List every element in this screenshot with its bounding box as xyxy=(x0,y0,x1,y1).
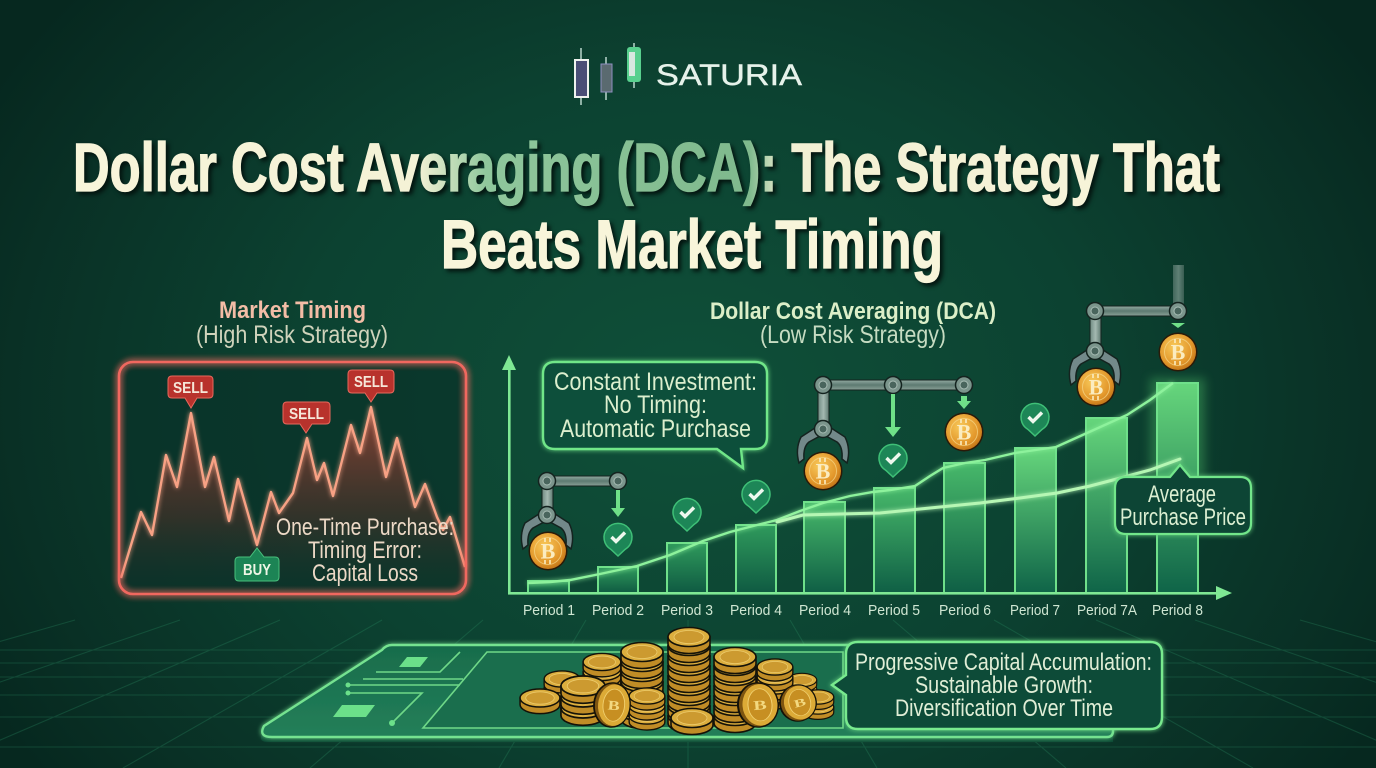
robot arm 3 with coins xyxy=(1069,265,1198,406)
text: one-time purchase note: Capital Loss xyxy=(312,560,418,587)
robot arm 1 with coin xyxy=(521,472,626,570)
tag: sell 2: SELL xyxy=(289,406,324,423)
chart: DCA bars xyxy=(502,355,1232,619)
period labels: Period 4 xyxy=(730,602,782,619)
text: one-time purchase note: One-Time Purchase: xyxy=(276,514,454,541)
callout: average purchase price: Purchase Price xyxy=(1120,504,1246,531)
back stacks xyxy=(544,653,817,710)
heading: market timing xyxy=(196,297,388,349)
callout: progressive capital accumulation: Sustainable Growth: xyxy=(915,672,1093,699)
period labels: Period 7A xyxy=(1077,602,1137,619)
price line xyxy=(121,407,465,578)
callout: constant investment xyxy=(543,362,767,468)
period labels: Period 1 xyxy=(523,602,575,619)
central stack xyxy=(668,628,710,732)
price area fill xyxy=(121,407,465,592)
platform xyxy=(261,645,1113,742)
coin pile xyxy=(520,628,834,734)
period labels: Period 2 xyxy=(592,602,644,619)
floor grid xyxy=(0,620,1376,768)
text: one-time purchase note: Timing Error: xyxy=(308,537,422,564)
heading: market timing: (High Risk Strategy) xyxy=(196,321,388,349)
axes xyxy=(502,355,1232,600)
icon: candlestick logo xyxy=(575,43,641,105)
callout: average purchase price xyxy=(1115,465,1251,534)
tag: sell 3: SELL xyxy=(354,374,388,391)
panel border xyxy=(119,362,466,594)
panel: market timing chart xyxy=(119,362,466,594)
period labels: Period 7 xyxy=(1010,602,1060,619)
callout: constant investment: No Timing: xyxy=(604,391,707,419)
average purchase price curve xyxy=(777,459,1180,522)
circuit chips xyxy=(333,657,428,726)
period labels: Period 3 xyxy=(661,602,713,619)
mid stacks xyxy=(621,642,756,732)
logo: Saturia xyxy=(575,43,802,105)
callout: constant investment: Automatic Purchase xyxy=(560,415,751,443)
tag: buy xyxy=(235,548,279,581)
circuit traces xyxy=(348,652,463,723)
heading: market timing: Market Timing xyxy=(219,297,366,324)
period labels: Period 5 xyxy=(868,602,920,619)
text: one-time purchase note xyxy=(276,514,454,587)
tag: sell 1: SELL xyxy=(173,380,208,397)
period labels: Period 4 xyxy=(799,602,851,619)
bar glow xyxy=(1150,378,1205,478)
tag: sell 2 xyxy=(283,402,330,433)
period labels xyxy=(523,602,1203,619)
heading: dollar cost averaging: (Low Risk Strategy) xyxy=(760,321,946,349)
callout: progressive capital accumulation xyxy=(832,642,1162,729)
checkmarks xyxy=(604,403,1049,556)
period labels: Period 6 xyxy=(939,602,991,619)
callout: constant investment: Constant Investment: xyxy=(554,368,757,396)
logo wordmark: SATURIA xyxy=(656,59,802,92)
heading: dollar cost averaging: Dollar Cost Averaging (DCA) xyxy=(710,298,996,325)
front stacks xyxy=(520,676,834,734)
investment curve xyxy=(528,383,1173,583)
bars xyxy=(528,383,1198,593)
tag: buy: BUY xyxy=(243,562,271,579)
callout: progressive capital accumulation: Progressive Capital Accumulation: xyxy=(855,649,1152,676)
robot arm 2 with coins xyxy=(797,376,984,490)
period labels: Period 8 xyxy=(1152,602,1203,619)
heading: dollar cost averaging xyxy=(710,298,996,349)
callout: average purchase price: Average xyxy=(1148,481,1216,508)
title: Beats Market Timing xyxy=(441,206,943,283)
title xyxy=(73,129,1220,283)
tag: sell 1 xyxy=(168,376,213,408)
tag: sell 3 xyxy=(348,370,394,402)
callout: progressive capital accumulation: Diversification Over Time xyxy=(895,695,1113,722)
